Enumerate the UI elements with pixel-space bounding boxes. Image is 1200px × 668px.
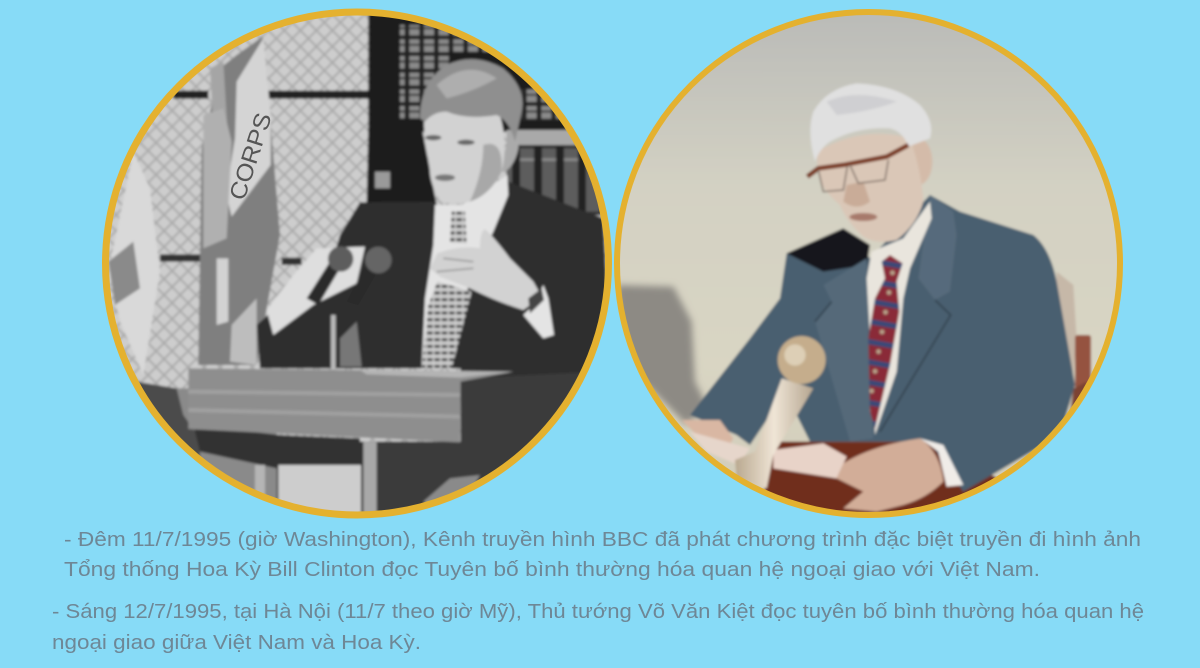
hair — [420, 59, 523, 142]
gold ring: left photo — [106, 12, 608, 515]
caption: Clinton statement — [64, 529, 1141, 581]
caption: Võ Văn Kiệt statement: ngoại giao giữa Việt Nam và Hoa Kỳ. — [52, 632, 421, 654]
glasses — [807, 145, 908, 192]
ear — [912, 141, 933, 184]
shirt — [867, 202, 932, 435]
caption: Võ Văn Kiệt statement: - Sáng 12/7/1995, tại Hà Nội (11/7 theo giờ Mỹ), Thủ tướng Võ Văn Kiệt đọc tuyên bố bình thường hóa quan hệ — [52, 601, 1144, 623]
caption: Clinton statement: Tổng thống Hoa Kỳ Bill Clinton đọc Tuyên bố bình thường hóa quan hệ ngoại giao với Việt Nam. — [64, 559, 1040, 581]
tie — [450, 212, 467, 243]
photo: Võ Văn Kiệt reading the statement — [610, 5, 1125, 520]
white hair — [810, 83, 931, 162]
left hand and paper — [682, 418, 734, 443]
chair — [1056, 272, 1077, 372]
suit — [257, 182, 613, 518]
gold ring: right photo — [617, 12, 1120, 515]
flags behind the podium — [198, 37, 280, 365]
gesturing hand — [430, 229, 542, 310]
microphone — [735, 378, 813, 488]
shirt — [422, 175, 508, 368]
flag lettering: CORPS — [224, 110, 277, 203]
caption: Võ Văn Kiệt statement — [52, 601, 1144, 654]
tie — [868, 255, 903, 428]
caption: Clinton statement: - Đêm 11/7/1995 (giờ Washington), Kênh truyền hình BBC đã phát chương trình đặc biệt truyền đi hình ảnh — [64, 529, 1141, 551]
raised hand and papers — [267, 247, 365, 335]
right hand — [837, 438, 943, 512]
right cuff — [920, 438, 963, 487]
suit — [690, 195, 1075, 492]
table — [763, 440, 997, 512]
podium — [188, 368, 513, 442]
face — [817, 134, 923, 242]
face — [502, 144, 520, 171]
photo: Bill Clinton at the podium — [100, 5, 615, 520]
